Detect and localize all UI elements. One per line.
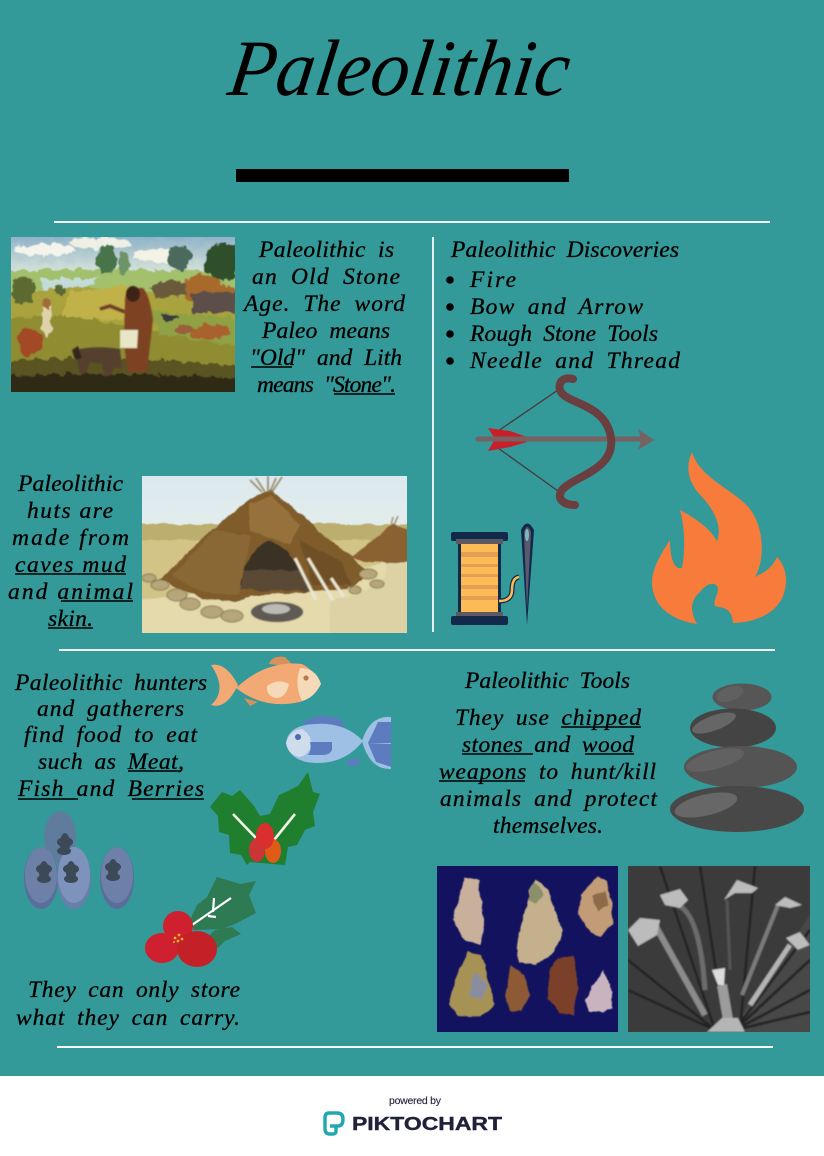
text: discoveries list: Fire <box>469 267 516 293</box>
text: paleolithic definition: means "Stone". <box>257 372 396 398</box>
text: huts: and animal <box>8 579 133 605</box>
text: paleolithic definition <box>242 237 405 398</box>
text: hunters and gatherers <box>14 670 207 802</box>
picture: stone tools with handles <box>628 866 810 1032</box>
picture: paleolithic village scene <box>11 237 235 392</box>
icon: bow and arrow <box>478 378 654 505</box>
picture: paleolithic hut <box>135 476 415 640</box>
text: paleolithic definition: Paleo means <box>261 318 390 344</box>
text: discoveries list: Paleolithic Discoveries <box>450 237 679 263</box>
icon: red berries with leaves <box>145 877 256 967</box>
text: storage note: what they can carry. <box>16 1005 240 1031</box>
text: discoveries list <box>446 237 680 374</box>
footer: powered by piktochart: PIKTOCHART <box>352 1113 503 1134</box>
text: huts: caves mud <box>15 552 126 578</box>
text: discoveries list: Rough Stone Tools <box>469 321 658 347</box>
footer band <box>0 1076 824 1156</box>
title underline bar <box>236 169 569 182</box>
icon: blueberries <box>24 811 134 909</box>
text: paleolithic tools: weapons to hunt/kill <box>439 759 656 785</box>
text: discoveries list: Needle and Thread <box>469 348 680 374</box>
icon: holly with berries <box>210 772 320 865</box>
icon: blue fish <box>286 716 391 769</box>
footer: powered by piktochart <box>325 1095 503 1134</box>
text: huts: made from <box>12 525 129 551</box>
text: huts: huts are <box>27 498 113 524</box>
footer: powered by piktochart: powered by <box>389 1095 442 1107</box>
text: hunters and gatherers: Paleolithic hunters <box>14 670 207 696</box>
text: hunters and gatherers: Fish and Berries <box>17 776 204 802</box>
text: hunters and gatherers: find food to eat <box>24 722 197 748</box>
text: paleolithic tools: animals and protect <box>440 786 657 812</box>
text: storage note <box>16 977 240 1031</box>
icon: thread spool and needle <box>451 524 534 625</box>
text: discoveries list: Bow and Arrow <box>470 294 643 320</box>
text: storage note: They can only store <box>28 977 240 1003</box>
text: paleolithic tools: stones and wood <box>462 732 634 758</box>
icon: orange fish <box>211 657 321 706</box>
title: Paleolithic <box>223 24 576 113</box>
text: paleolithic tools: themselves. <box>493 813 603 839</box>
text: paleolithic definition: Age. The word <box>242 291 405 317</box>
text: paleolithic tools <box>439 668 657 839</box>
text: paleolithic definition: "Old" and Lith <box>250 345 402 371</box>
icon: stacked stones <box>670 683 804 832</box>
text: paleolithic definition: an Old Stone <box>252 264 400 290</box>
text: huts: Paleolithic <box>17 471 124 497</box>
picture: chipped stones <box>437 866 618 1032</box>
text: paleolithic tools: They use chipped <box>455 705 641 731</box>
text: huts: skin. <box>48 606 93 632</box>
icon: fire <box>652 452 786 624</box>
text: paleolithic tools: Paleolithic Tools <box>464 668 630 694</box>
text: huts <box>8 471 133 632</box>
text: paleolithic definition: Paleolithic is <box>258 237 394 263</box>
text: hunters and gatherers: and gatherers <box>37 696 184 722</box>
text: hunters and gatherers: such as Meat, <box>38 749 184 775</box>
